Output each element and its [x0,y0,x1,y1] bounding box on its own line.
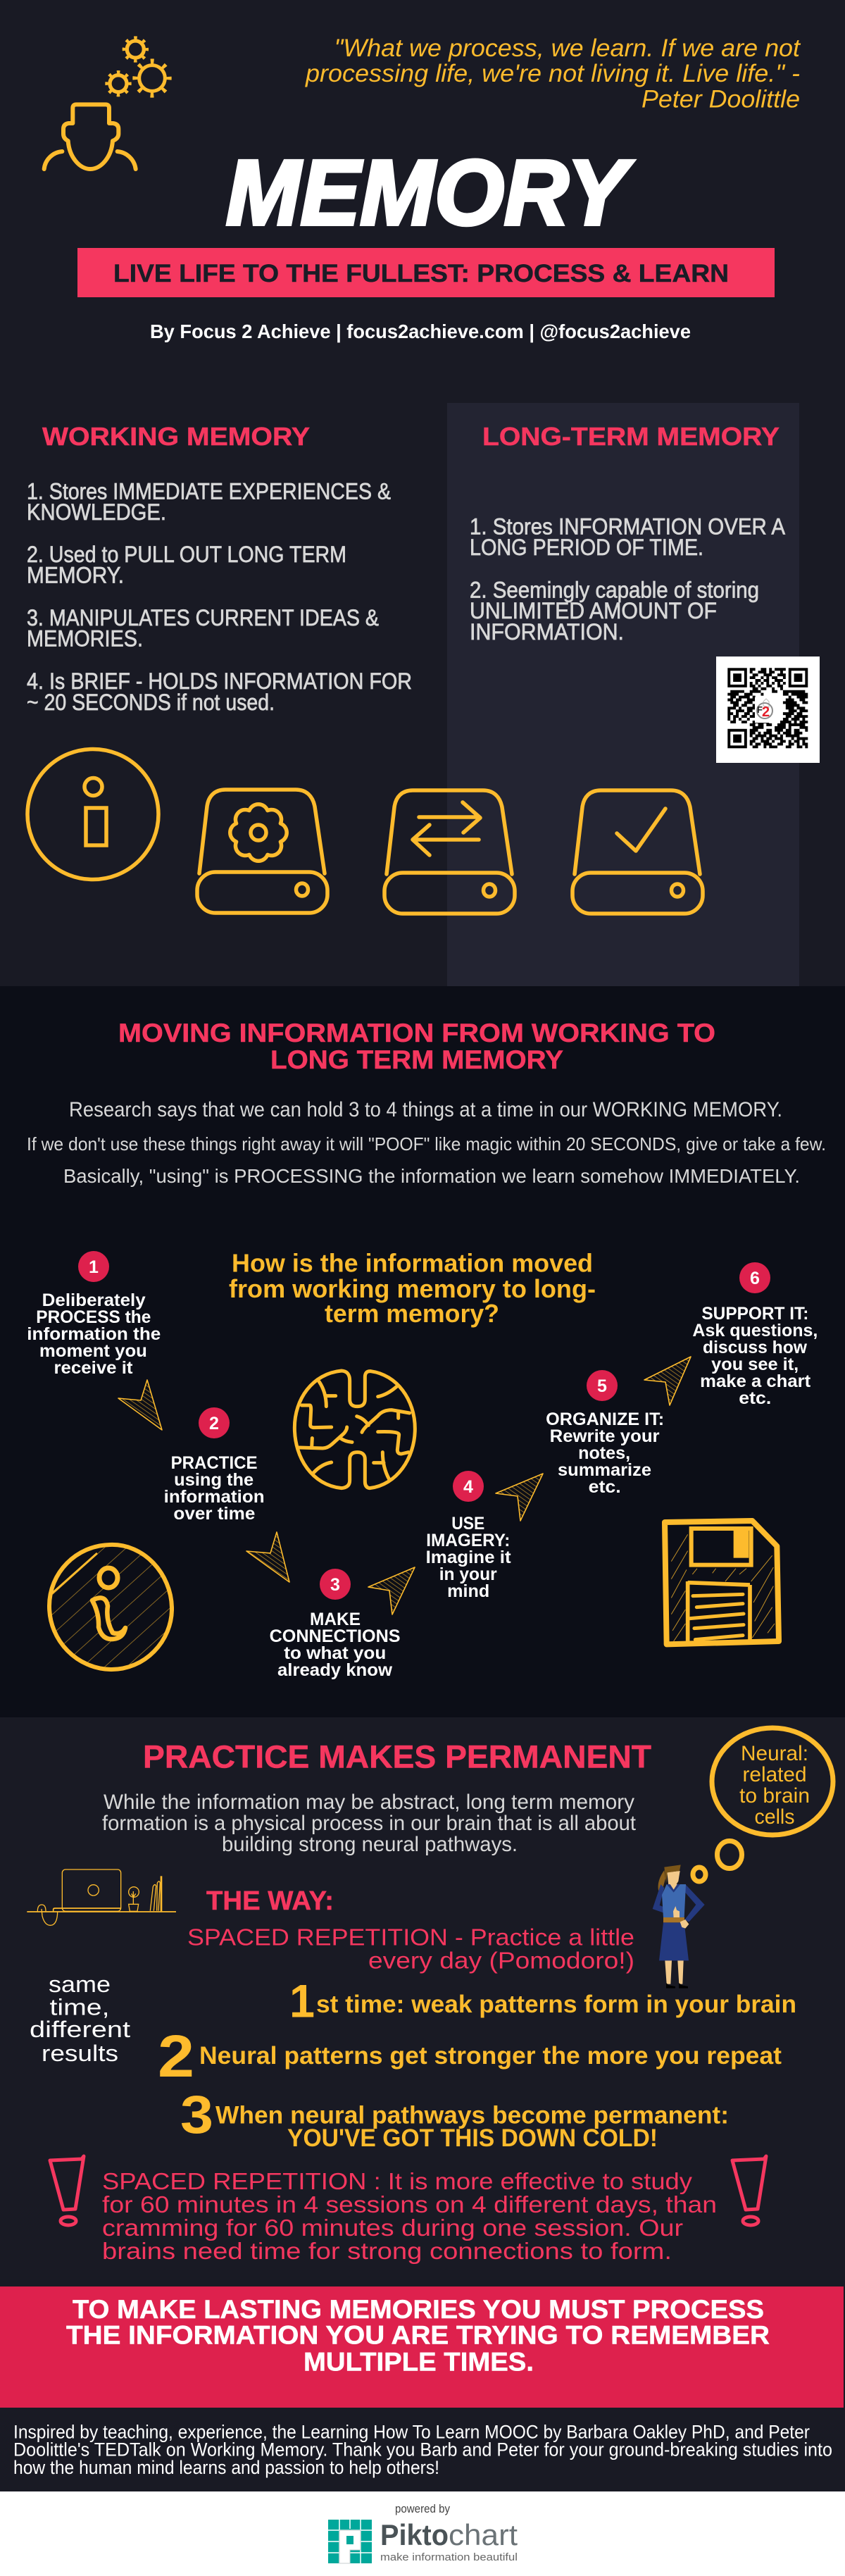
step 4: IMAGERY: [426,1531,510,1550]
step 3: CONNECTIONS [270,1626,401,1646]
step 5: 5 [597,1376,607,1396]
stage 3: YOU'VE GOT THIS DOWN COLD! [287,2124,658,2152]
panel: practice makes permanent [102,1738,651,1856]
step 4: mind [447,1581,489,1601]
list: working memory points: MEMORY. [27,562,124,587]
step 6: Ask questions, [692,1321,818,1340]
stage 2 [158,2023,782,2089]
step 6: SUPPORT IT: [701,1304,808,1324]
step 3: MAKE [310,1610,361,1629]
arrow: step 5 to 6 [644,1357,691,1405]
list: working memory points: ~ 20 SECONDS if not used. [27,690,275,715]
panel: working memory [27,422,412,715]
arrow: step 2 to 3 [246,1532,289,1582]
callout: neural thought bubble: to brain [739,1784,810,1807]
subtitle banner [77,248,775,297]
step 1: receive it [54,1358,133,1378]
heading: the way: THE WAY: [206,1886,334,1916]
step 4: USE [451,1514,484,1533]
stage 3 [180,2085,729,2152]
subtitle banner: LIVE LIFE TO THE FULLEST: PROCESS & LEARN [113,260,729,287]
list: working memory points: 1. Stores IMMEDIATE EXPERIENCES & [27,479,391,504]
same time, different results: results [42,2041,118,2066]
step 6 [692,1262,818,1408]
credits text [13,2422,832,2478]
footer: Piktochart logo: chart [449,2518,518,2551]
icon: brain [294,1371,415,1488]
spaced repetition tip [187,1924,634,1974]
callout band text: THE INFORMATION YOU ARE TRYING TO REMEMBER [66,2320,770,2350]
heading: long-term memory: LONG-TERM MEMORY [482,422,780,451]
heading: moving information [118,1019,715,1074]
heading: moving information: LONG TERM MEMORY [270,1045,563,1074]
stage 1: st time: weak patterns form in your brain [316,1991,796,2018]
question heading: from working memory to long- [229,1274,596,1303]
stage 2: 2 [158,2023,194,2089]
step 4: in your [439,1564,497,1584]
intro text: Basically, "using" is PROCESSING the information we learn somehow IMMEDIATELY. [63,1165,800,1187]
quote: processing life, we're not living it. Live life." - [305,60,800,87]
same time, different results: same [49,1972,111,1997]
list: long-term memory points: 2. Seemingly capable of storing [470,578,759,603]
step 5: notes, [578,1443,630,1463]
icon: drive with gear [197,790,327,913]
step 2: over time [173,1504,255,1524]
panel: long-term memory [470,422,786,645]
intro paragraph: While the information may be abstract, long term memory [104,1791,634,1814]
list: working memory points: 3. MANIPULATES CURRENT IDEAS & [27,605,379,630]
credits text: how the human mind learns and passion to help others! [13,2457,439,2478]
heading: moving information: MOVING INFORMATION FROM WORKING TO [118,1019,715,1047]
spaced repetition note: brains need time for strong connections to form. [102,2238,672,2264]
icon: head with gears [44,38,169,169]
icon: sketched information circle [49,1545,172,1669]
step 2: using the [174,1470,254,1490]
list: working memory points [27,479,412,715]
icon: drive with check mark [572,790,703,914]
step 5: Rewrite your [550,1426,660,1446]
question heading: term memory? [325,1299,499,1328]
footer: Piktochart logo: powered by [395,2502,450,2515]
callout band text: TO MAKE LASTING MEMORIES YOU MUST PROCESS [73,2295,764,2324]
spaced repetition note: for 60 minutes in 4 sessions on 4 different days, than [102,2191,717,2217]
callout: neural thought bubble: Neural: [741,1742,808,1765]
quote [305,35,801,113]
step 5 [546,1370,664,1497]
step 6: make a chart [700,1371,811,1391]
question heading [229,1248,596,1328]
icon: exclamation right [732,2156,766,2225]
step 6: 6 [750,1269,760,1288]
QR centre logo [755,697,779,723]
step 1 [27,1251,161,1378]
panel: header [44,35,801,342]
step 2: 2 [209,1414,219,1433]
footer: Piktochart logo: Pikto [380,2518,449,2551]
step 5: summarize [558,1460,651,1480]
quote: "What we process, we learn. If we are not [334,35,801,62]
QR code [716,657,820,763]
same time, different results: different [30,2017,130,2042]
title: MEMORY [226,141,634,244]
step 5: ORGANIZE IT: [546,1410,664,1429]
step 1: moment you [39,1341,147,1361]
intro paragraph: formation is a physical process in our brain that is all about [102,1812,637,1835]
same time, different results [30,1972,130,2066]
icon: laptop on desk [27,1869,176,1925]
QR centre logo: 2 [762,704,770,720]
step 2: information [164,1487,265,1507]
list: working memory points: 2. Used to PULL OUT LONG TERM [27,542,346,567]
callout: neural thought bubble: related [742,1763,807,1786]
callout: neural thought bubble: cells [755,1805,794,1829]
list: working memory points: KNOWLEDGE. [27,499,166,525]
stage 3: 3 [180,2085,213,2145]
spaced repetition tip: every day (Pomodoro!) [368,1947,634,1974]
panel: moving information [27,1019,826,1328]
stage 3: When neural pathways become permanent: [215,2102,729,2129]
heading: practice makes permanent: PRACTICE MAKES PERMANENT [143,1738,651,1775]
step 3: to what you [284,1643,386,1663]
step 1: information the [27,1324,161,1344]
list: long-term memory points: UNLIMITED AMOUNT OF [470,598,717,623]
step 3: 3 [330,1575,340,1595]
step 6: etc. [739,1388,771,1408]
list: long-term memory points: 1. Stores INFORMATION OVER A [470,514,786,540]
step 1: 1 [89,1257,99,1277]
QR centre logo: F [757,704,763,715]
callout band text: MULTIPLE TIMES. [303,2347,534,2377]
step 3 [270,1569,401,1680]
icon: drive with transfer arrows [384,790,515,914]
callout band text [66,2295,770,2377]
icon: woman [653,1865,705,1989]
list: long-term memory points [470,514,786,645]
quote: Peter Doolittle [641,86,800,113]
intro text: If we don't use these things right away it will "POOF" like magic within 20 SECONDS, give or take a few. [27,1133,826,1155]
step 5: etc. [589,1477,621,1497]
stage 1: 1 [289,1975,315,2027]
step 4: 4 [463,1477,473,1497]
icon: sketched floppy disk [665,1521,779,1644]
step 6: discuss how [703,1338,808,1357]
arrow: step 4 to 5 [496,1474,543,1521]
footer: Piktochart logo: make information beautiful [380,2551,518,2563]
step 2 [164,1407,265,1524]
step 4: Imagine it [426,1548,511,1567]
callout: neural thought bubble [693,1728,833,1881]
intro paragraph [102,1791,637,1856]
spaced repetition note [102,2168,717,2264]
spaced repetition tip: SPACED REPETITION - Practice a little [187,1924,634,1950]
step 2: PRACTICE [171,1453,258,1473]
stage 2: Neural patterns get stronger the more you repeat [199,2042,782,2070]
byline: By Focus 2 Achieve | focus2achieve.com | @focus2achieve [150,321,691,342]
step 1: Deliberately [42,1290,146,1310]
list: long-term memory points: INFORMATION. [470,619,624,645]
intro paragraph: building strong neural pathways. [222,1833,518,1856]
stage 1 [289,1975,796,2027]
step 1: PROCESS the [36,1307,151,1327]
icon: information circle [27,749,158,879]
step 6: you see it, [711,1355,799,1374]
intro text [27,1098,826,1187]
list: working memory points: 4. Is BRIEF - HOLDS INFORMATION FOR [27,668,412,694]
arrow: step 3 to 4 [368,1567,415,1614]
icon: exclamation left [50,2156,84,2225]
heading: working memory: WORKING MEMORY [42,422,310,451]
arrow: step 1 to 2 [118,1380,162,1430]
footer: Piktochart logo [328,2502,518,2563]
list: working memory points: MEMORIES. [27,626,143,651]
intro text: Research says that we can hold 3 to 4 things at a time in our WORKING MEMORY. [69,1098,782,1121]
spaced repetition note: cramming for 60 minutes during one session. Our [102,2215,683,2241]
step 3: already know [277,1660,393,1680]
step 4 [426,1471,511,1601]
question heading: How is the information moved [232,1248,593,1278]
spaced repetition note: SPACED REPETITION : It is more effective to study [102,2168,693,2194]
list: long-term memory points: LONG PERIOD OF TIME. [470,535,703,560]
same time, different results: time, [49,1995,110,2020]
